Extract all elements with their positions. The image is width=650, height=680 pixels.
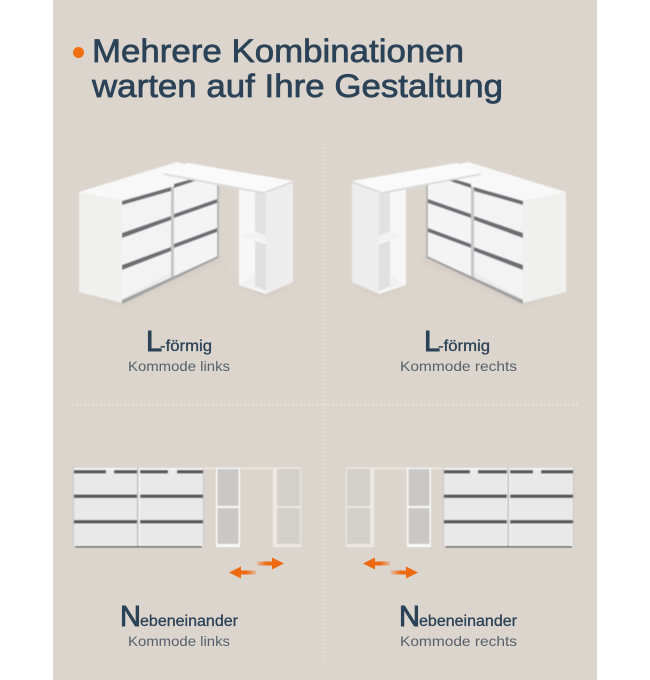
label: Kommode links: Kommode links — [128, 633, 230, 649]
label: Nebeneinander: N — [120, 601, 141, 633]
panel: L-shaped, dresser right — [349, 162, 566, 374]
label: Nebeneinander: ebeneinander — [419, 613, 517, 630]
image: L-shaped furniture, dresser right — [349, 162, 566, 306]
title text — [91, 33, 503, 104]
panel: L-shaped, dresser left — [79, 162, 296, 374]
arrow: right — [257, 558, 284, 570]
title text: warten auf Ihre Gestaltung — [91, 68, 503, 104]
label: L-förmig: -förmig — [438, 338, 490, 355]
label: L-förmig: L — [146, 326, 162, 358]
label: Kommode links: Kommode links — [128, 358, 230, 374]
label: Nebeneinander: N — [399, 601, 420, 633]
label: Kommode rechts: Kommode rechts — [400, 633, 517, 649]
image: side-by-side furniture, dresser left — [73, 468, 301, 548]
title text: Mehrere Kombinationen — [92, 33, 464, 69]
icon: orange bullet — [73, 47, 84, 58]
panel: side by side, dresser right — [346, 468, 574, 649]
title — [73, 33, 503, 104]
arrow: left — [363, 558, 390, 570]
arrow: right — [391, 566, 418, 578]
arrow: left — [229, 566, 256, 578]
label: Kommode rechts: Kommode rechts — [400, 358, 517, 374]
label: L-förmig: L — [424, 326, 440, 358]
label: L-förmig: -förmig — [160, 338, 212, 355]
panel: side by side, dresser left — [73, 468, 301, 649]
image: L-shaped furniture, dresser left — [79, 162, 296, 306]
label: Nebeneinander: ebeneinander — [140, 613, 238, 630]
image: side-by-side furniture, dresser right — [346, 468, 574, 548]
